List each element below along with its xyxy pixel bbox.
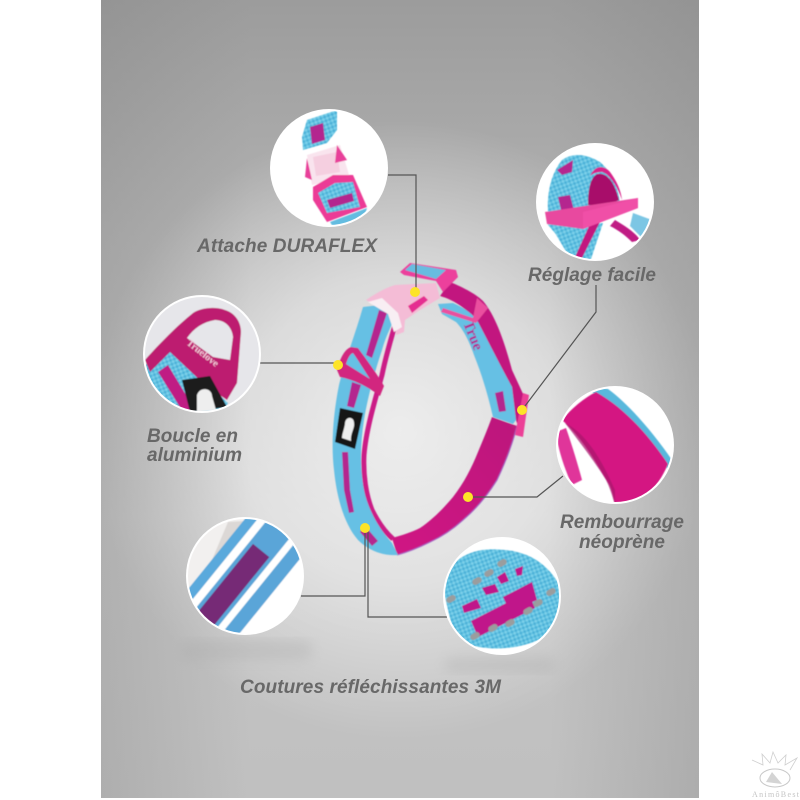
leader line: Boucle	[260, 362, 338, 364]
strap	[145, 350, 228, 415]
black label	[182, 376, 227, 412]
photo: Attache DURAFLEX	[270, 109, 388, 230]
neoprene band	[562, 392, 668, 505]
top strip	[448, 548, 465, 570]
marker dots	[333, 287, 527, 533]
inner magenta lining	[588, 174, 619, 207]
faint shadows under photos	[182, 640, 555, 672]
inner left strap	[556, 428, 582, 485]
label: Rembourrage néoprène	[560, 512, 684, 553]
background panel	[101, 0, 699, 798]
label: Coutures réfléchissantes 3M: Coutures réfléchissantes 3M	[240, 677, 502, 698]
buckle bottom clip	[408, 296, 428, 313]
collar neoprene padding	[392, 417, 517, 555]
photo: Boucle en aluminium	[143, 295, 261, 413]
label: Attache DURAFLEX: Attache DURAFLEX	[196, 236, 378, 257]
padding outer rim	[397, 426, 517, 555]
diagonal stripes	[189, 519, 302, 633]
photo: Coutures réfléchissantes left	[186, 517, 304, 635]
right adjuster	[515, 393, 529, 437]
woven label with dog logo	[335, 408, 363, 449]
buckle top pink frame	[400, 263, 458, 292]
leader line: Rembourrage	[468, 476, 563, 497]
clear buckle	[307, 145, 350, 185]
label: Boucle en aluminium	[147, 426, 242, 466]
leader line: Attache	[388, 175, 416, 293]
reflective stitches	[445, 558, 557, 641]
strap in frame	[318, 182, 360, 213]
lower strap	[555, 222, 604, 259]
watermark: AnimôBest: AnimôBest	[752, 790, 800, 799]
strap slider	[441, 298, 488, 323]
aluminium D ring	[337, 347, 384, 396]
collar	[333, 263, 529, 555]
watermark: AnimôBest	[752, 752, 800, 799]
leader line: Coutures right	[368, 528, 447, 617]
label: Rembourrage néoprène: néoprène	[579, 532, 665, 553]
collar right strap	[438, 303, 516, 424]
collar far side magenta band	[440, 282, 524, 425]
photo: Coutures réfléchissantes right	[440, 537, 562, 655]
aluminium ring	[145, 308, 241, 400]
right strap lettering: True	[459, 319, 486, 353]
fabric background	[213, 521, 243, 558]
ring engraving: Truelove	[184, 338, 221, 370]
photo: Réglage facile	[536, 143, 654, 262]
paw toes	[462, 566, 523, 613]
label: Rembourrage néoprène: Rembourrage	[560, 512, 684, 533]
label: Réglage facile: Réglage facile	[528, 265, 656, 286]
strap top	[302, 110, 337, 150]
right strap	[610, 220, 640, 242]
label: Boucle en aluminium: aluminium	[147, 445, 242, 466]
paw motif	[557, 160, 575, 214]
buckle highlights	[368, 298, 402, 332]
pink frame	[313, 175, 367, 222]
paw pad	[470, 601, 536, 637]
photo: Rembourrage néoprène	[556, 386, 674, 505]
pink slider	[545, 198, 638, 229]
strap arch	[547, 154, 620, 234]
right strap lettering	[459, 319, 506, 412]
blue edge	[590, 388, 672, 470]
leader line: Réglage	[522, 285, 596, 410]
collar left strap	[333, 305, 398, 555]
collar left strap magenta edge	[364, 315, 398, 539]
buckle clear body	[366, 283, 440, 335]
strap in buckle	[405, 264, 446, 279]
left strap lettering	[342, 310, 387, 546]
label: Boucle en aluminium: Boucle en	[147, 426, 238, 447]
leader line: Coutures left	[301, 528, 365, 596]
band stitching shadow	[565, 423, 615, 505]
